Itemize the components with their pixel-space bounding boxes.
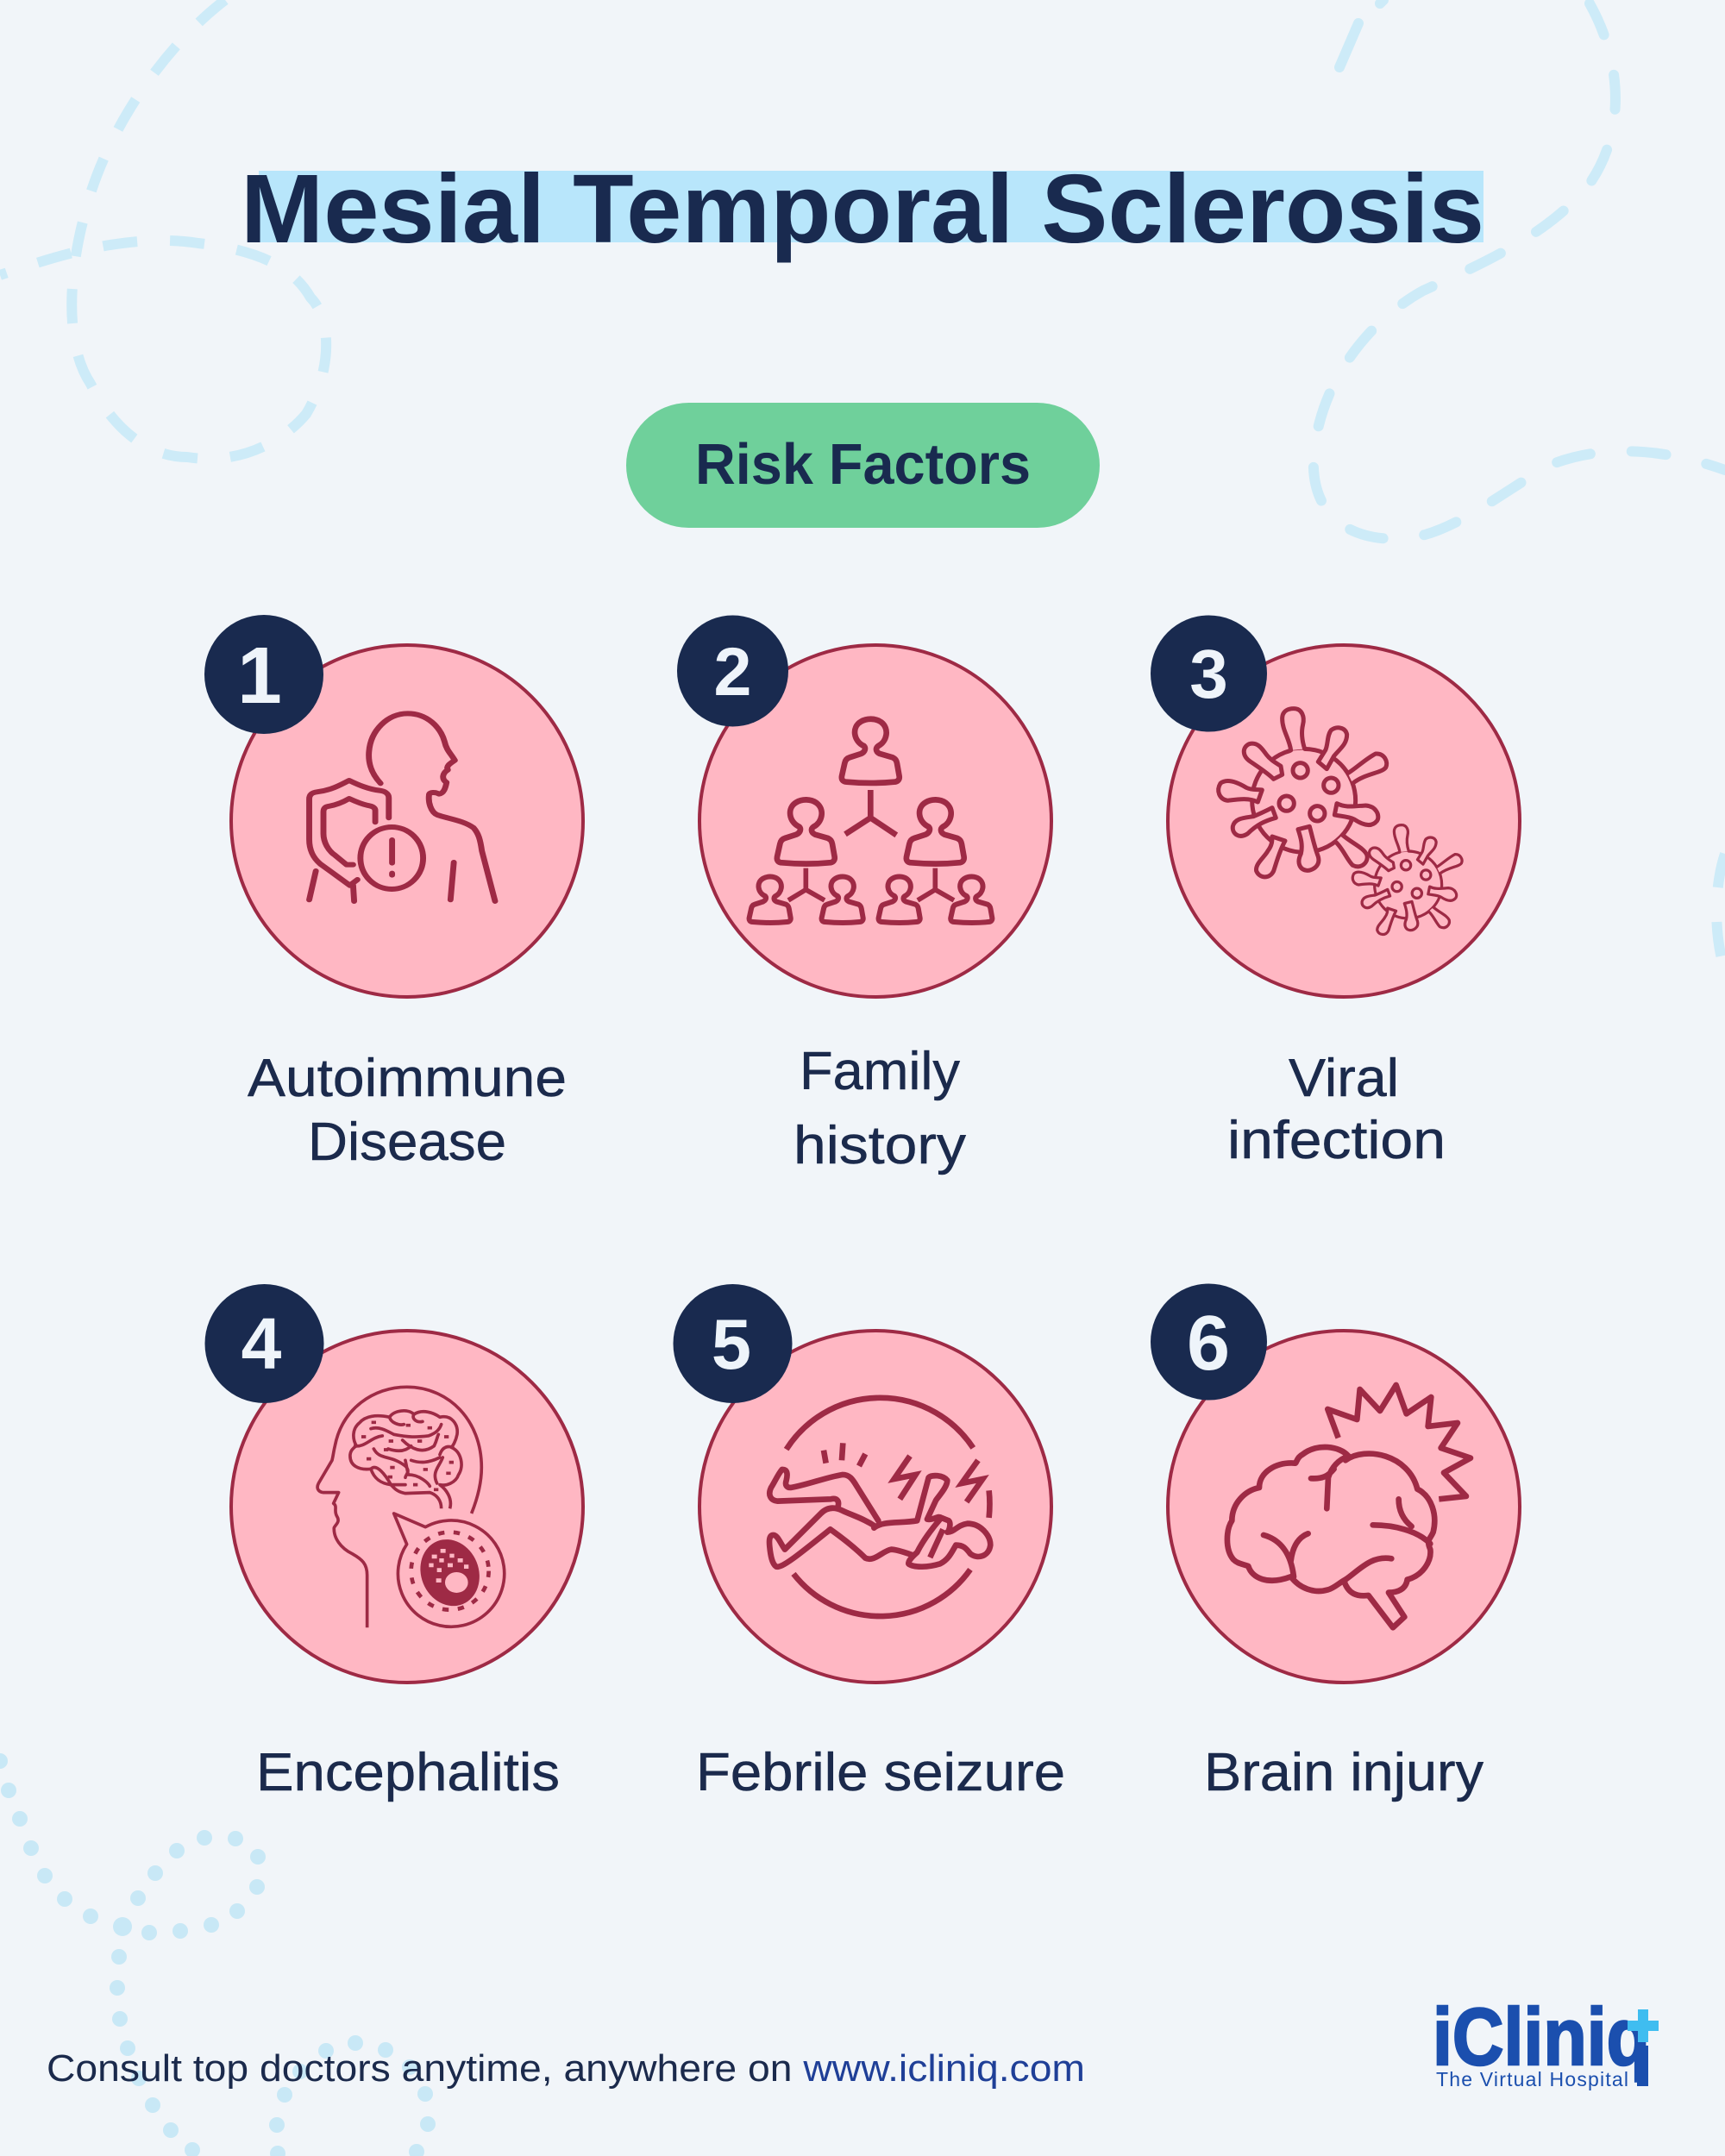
logo tagline: The Virtual Hospital (1436, 2068, 1628, 2090)
number badge 3 (1151, 616, 1267, 731)
icon: person having a seizure (769, 1398, 990, 1616)
label: autoimmune disease: Disease (308, 1112, 506, 1172)
number badge 3: 3 (1189, 636, 1228, 712)
icon: head with brain and cell callout (317, 1387, 505, 1627)
label: brain injury: Brain injury (1204, 1743, 1484, 1802)
number badge 4 (205, 1284, 324, 1403)
label: viral infection: infection (1227, 1111, 1446, 1170)
heading: risk factors pill: Risk Factors (695, 432, 1031, 497)
number badge 1 (204, 615, 323, 734)
label: autoimmune disease (248, 1049, 567, 1172)
number badge 2: 2 (714, 633, 751, 710)
logo plus sign (1628, 2009, 1659, 2042)
decorative dashed curves (0, 0, 1725, 966)
logo wordmark: iCliniq (1433, 1991, 1650, 2082)
pink circle 3 (1168, 645, 1520, 997)
pink circle 5 (699, 1331, 1051, 1683)
label: autoimmune disease: Autoimmune (248, 1049, 567, 1108)
decorative dotted curves (0, 1753, 436, 2156)
number badge 5: 5 (712, 1304, 751, 1384)
pink circle 6 (1168, 1331, 1520, 1683)
number badge 5 (673, 1284, 792, 1403)
panel: encephalitis (205, 1284, 583, 1802)
label: febrile seizure: Febrile seizure (696, 1743, 1065, 1802)
panel: family history (677, 616, 1051, 1175)
heading: risk factors pill (626, 403, 1100, 528)
icon: brain with impact burst (1227, 1385, 1471, 1627)
panel: viral infection (1151, 616, 1520, 1170)
pink circle 2 (699, 645, 1051, 997)
number badge 2 (677, 616, 788, 726)
number badge 6: 6 (1187, 1300, 1230, 1387)
logo q descender (1637, 2046, 1648, 2086)
number badge 4: 4 (242, 1303, 282, 1384)
label: viral infection (1227, 1049, 1446, 1170)
number badge 1: 1 (237, 630, 282, 720)
label: viral infection: Viral (1289, 1049, 1399, 1108)
label: family history: history (794, 1116, 966, 1175)
panel: autoimmune disease (204, 615, 583, 1172)
title: Mesial Temporal Sclerosis (241, 154, 1484, 263)
footer consultation text: Consult top doctors anytime, anywhere on www.icliniq.com (47, 2047, 1085, 2090)
logo: iCliniq (1433, 1991, 1659, 2090)
label: family history (794, 1042, 966, 1175)
label: family history: Family (800, 1042, 960, 1101)
pink circle 1 (231, 645, 583, 997)
pink circle 4 (231, 1331, 583, 1683)
panel: brain injury (1151, 1283, 1520, 1802)
number badge 6 (1151, 1283, 1267, 1401)
label: encephalitis: Encephalitis (256, 1743, 560, 1802)
icon: family tree of people (750, 719, 992, 923)
icon: person with shield and alert (310, 713, 495, 901)
icon: virus particles (1219, 709, 1462, 935)
panel: febrile seizure (673, 1284, 1065, 1802)
